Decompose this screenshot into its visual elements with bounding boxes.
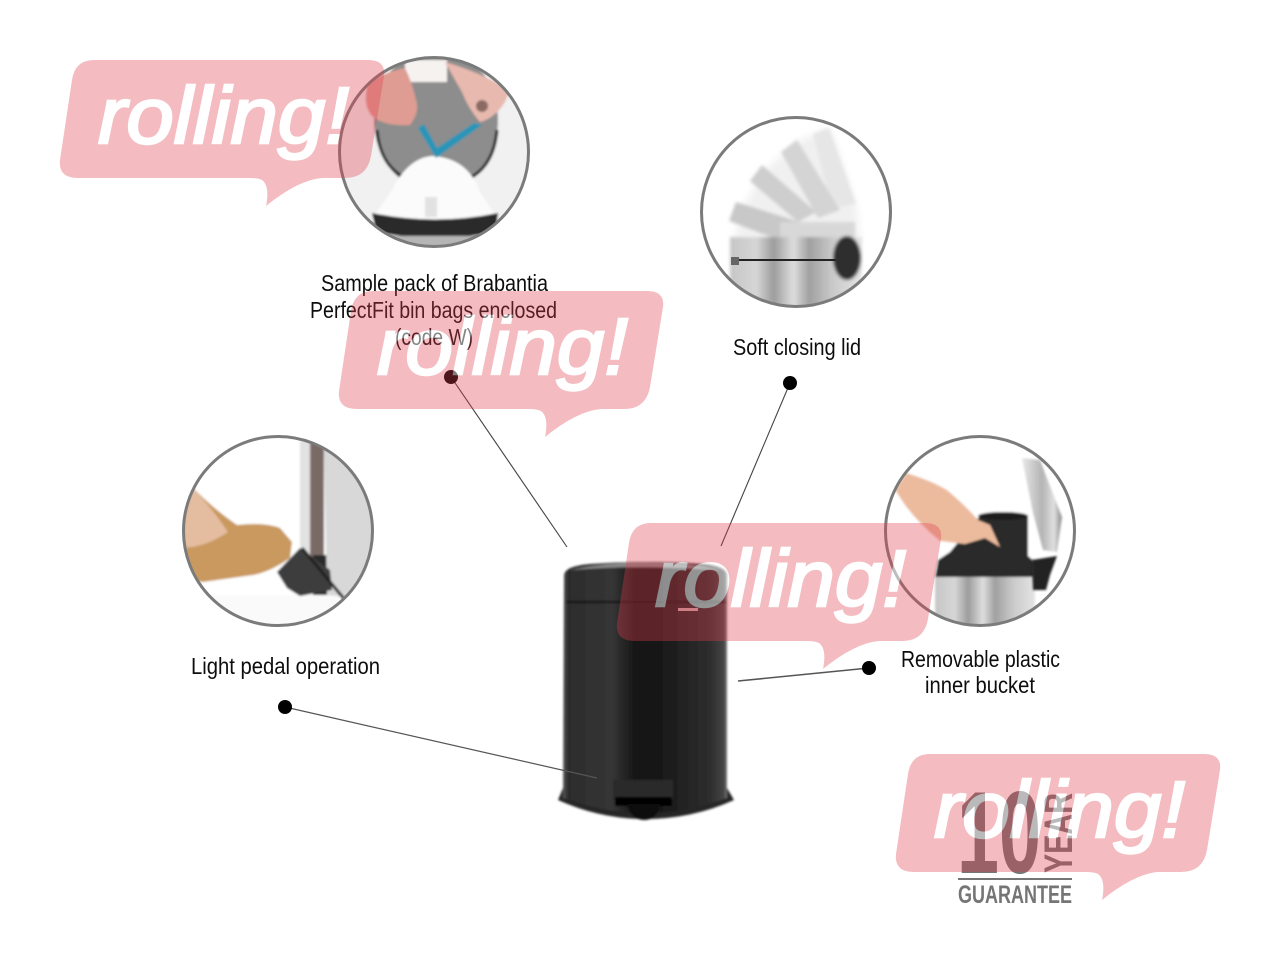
photo circle: soft closing lid — [700, 115, 895, 310]
photo circle: pedal — [180, 435, 380, 630]
callout line: lid — [721, 376, 797, 546]
photo circle: inner bucket — [885, 435, 1075, 630]
watermark bubble 3 — [617, 523, 941, 669]
watermark bubble 1 — [60, 60, 384, 206]
label: soft closing lid: Soft closing lid — [733, 334, 861, 360]
callout line: bag — [444, 370, 567, 547]
photo circle: bin bag sample — [338, 56, 530, 248]
label: sample pack: (code W) — [395, 324, 473, 350]
label: removable bucket: inner bucket — [925, 672, 1036, 698]
watermark bubble 2 — [339, 291, 663, 437]
label: removable bucket — [901, 646, 1060, 698]
10 year guarantee badge: GUARANTEE — [958, 881, 1072, 909]
watermark bubble 4: rolling! — [934, 765, 1185, 854]
10 year guarantee badge: 10 — [957, 767, 1041, 898]
label: sample pack: PerfectFit bin bags enclosed — [310, 297, 557, 323]
watermark bubble 1: rolling! — [98, 71, 349, 160]
label: light pedal: Light pedal operation — [191, 653, 380, 679]
watermark bubble 4 — [896, 754, 1220, 900]
watermark bubble 2: rolling! — [377, 302, 628, 391]
callout line: pedal — [278, 700, 597, 778]
label: sample pack — [310, 270, 557, 350]
callout line: bucket — [738, 661, 876, 681]
10 year guarantee badge: YEAR — [1037, 793, 1081, 873]
watermark bubble 3: rolling! — [655, 534, 906, 623]
label: sample pack: Sample pack of Brabantia — [321, 270, 548, 296]
product: black pedal bin — [558, 562, 734, 820]
label: removable bucket: Removable plastic — [901, 646, 1060, 672]
